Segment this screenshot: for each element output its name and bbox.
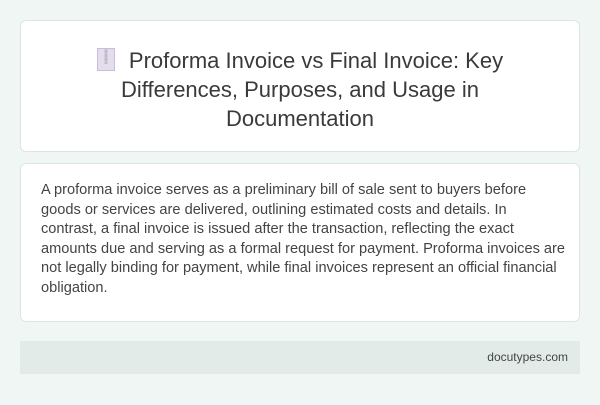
description card	[20, 163, 580, 322]
icon: invoice: ≡	[104, 60, 108, 66]
icon: invoice: ≡	[104, 56, 108, 62]
description text: not legally binding for payment, while final invoices represent an official financial	[41, 260, 557, 276]
description text: obligation.	[41, 280, 108, 296]
icon: invoice: ≡	[104, 52, 108, 58]
icon: invoice: ≡	[104, 48, 108, 54]
icon: invoice	[97, 48, 115, 71]
footer	[20, 341, 580, 374]
description text: contrast, a final invoice is issued after the transaction, reflecting the exact	[41, 221, 514, 237]
footer: docutypes.com	[487, 350, 568, 364]
description text: A proforma invoice serves as a preliminary bill of sale sent to buyers before	[41, 182, 526, 198]
description text: goods or services are delivered, outlining estimated costs and details. In	[41, 202, 507, 218]
title: Proforma Invoice vs Final Invoice: Key Differences, Purposes, and Usage in Documentation	[121, 48, 503, 131]
title card	[20, 20, 580, 152]
description text: amounts due and serving as a formal request for payment. Proforma invoices are	[41, 240, 565, 256]
description text	[41, 182, 565, 296]
